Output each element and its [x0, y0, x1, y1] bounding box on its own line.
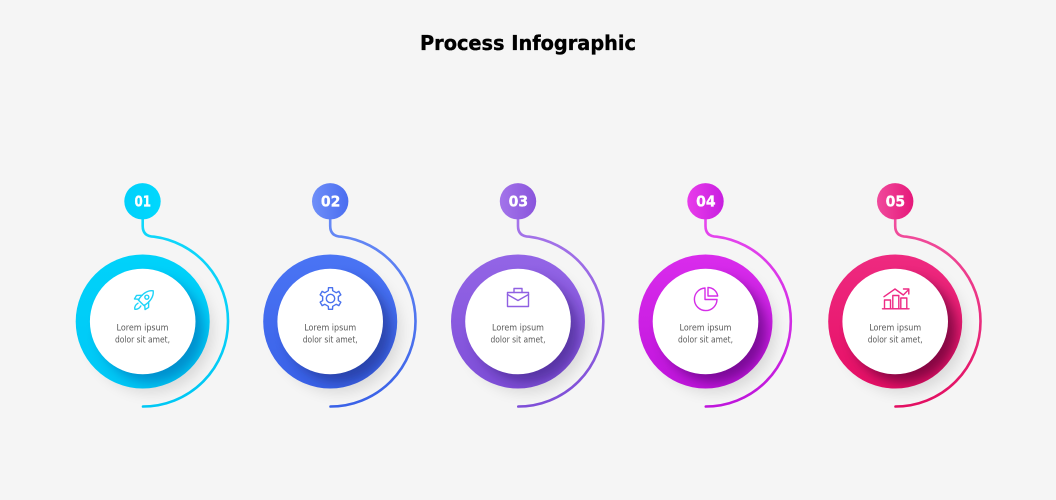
- icon: bar chart with arrow: [882, 289, 909, 309]
- number badge 4: [687, 183, 724, 220]
- step 1: [76, 183, 228, 406]
- white disc 5: [842, 269, 948, 374]
- white disc 1: [90, 269, 196, 374]
- number badge 5: 05: [886, 193, 905, 211]
- number badge 4: 04: [696, 193, 716, 211]
- text 5: Lorem ipsum: [869, 324, 921, 334]
- text 3: [490, 324, 546, 346]
- ring 3: [451, 254, 588, 393]
- number badge 3: [500, 183, 536, 220]
- text 5: [868, 324, 923, 346]
- connector line 5: [895, 219, 981, 406]
- text 3: dolor sit amet,: [490, 336, 546, 346]
- step 5: [828, 183, 981, 406]
- white disc 2: [277, 269, 383, 374]
- white disc 3: [465, 269, 571, 374]
- connector line 3: [518, 219, 603, 406]
- text 2: Lorem ipsum: [304, 324, 356, 334]
- text 4: dolor sit amet,: [678, 336, 733, 346]
- number badge 1: [124, 183, 161, 220]
- text 2: dolor sit amet,: [303, 336, 358, 346]
- white disc 4: [653, 269, 758, 374]
- number badge 1: 01: [134, 193, 151, 211]
- number badge 5: [877, 183, 913, 220]
- icon: pie chart: [694, 288, 718, 311]
- connector line 4: [706, 219, 791, 406]
- connector line 1: [143, 219, 228, 406]
- ring 2: [263, 254, 400, 393]
- ring 4: [638, 254, 776, 393]
- step 2: [263, 183, 416, 406]
- title: Process Infographic: [420, 31, 636, 55]
- text 1: dolor sit amet,: [115, 336, 170, 346]
- icon: gear: [320, 288, 341, 309]
- step 3: [451, 183, 603, 406]
- number badge 3: 03: [509, 193, 528, 211]
- number badge 2: 02: [321, 193, 340, 211]
- number badge 2: [312, 183, 348, 220]
- text 3: Lorem ipsum: [492, 324, 544, 334]
- ring 5: [828, 254, 966, 393]
- text 4: Lorem ipsum: [680, 324, 732, 334]
- ring 1: [76, 254, 213, 393]
- connector line 2: [330, 219, 416, 406]
- text 2: [303, 324, 358, 346]
- icon: briefcase: [508, 288, 528, 306]
- text 1: [115, 324, 170, 346]
- text 5: dolor sit amet,: [868, 336, 923, 346]
- icon: rocket: [129, 285, 159, 315]
- step 4: [638, 183, 791, 406]
- text 1: Lorem ipsum: [116, 324, 168, 334]
- text 4: [678, 324, 733, 346]
